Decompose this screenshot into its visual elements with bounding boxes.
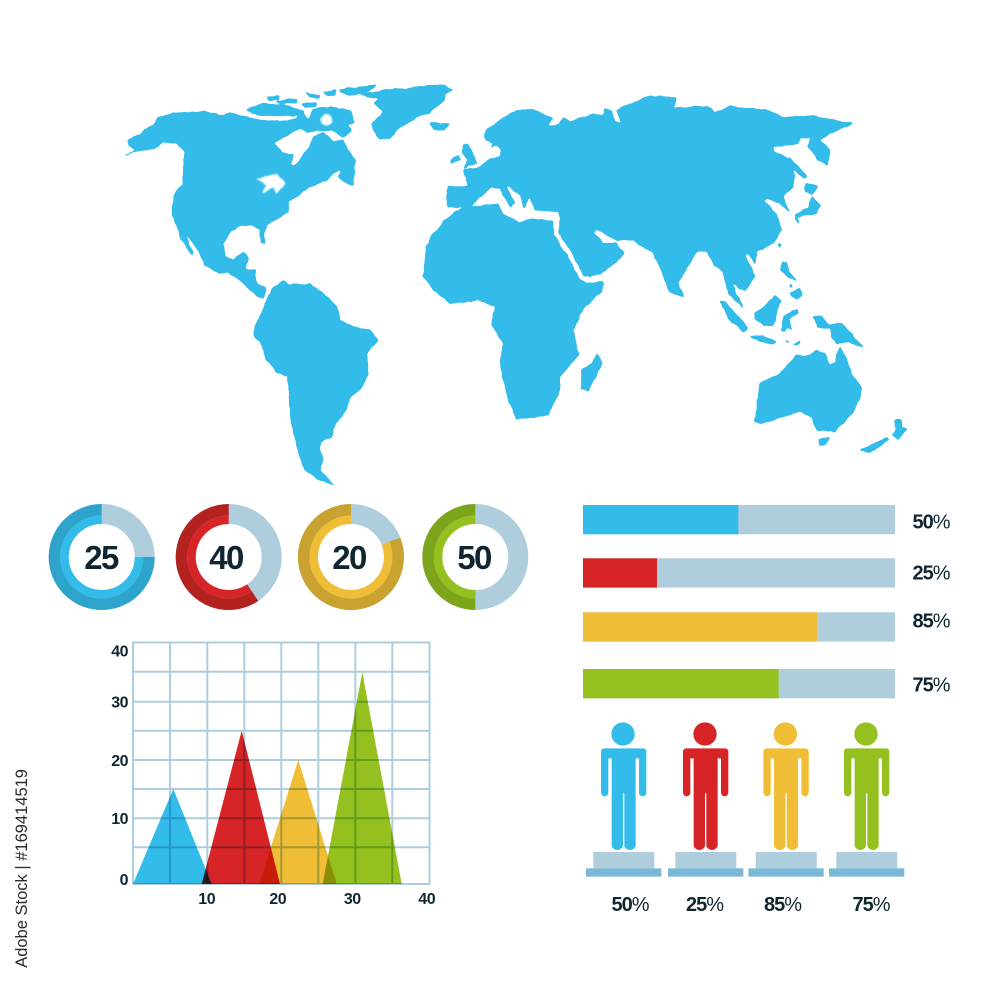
x axis labels: 20 xyxy=(269,891,287,908)
bar: 25%: 25% xyxy=(912,562,951,584)
bar: 85%: 85% xyxy=(912,610,951,632)
person: green 75% xyxy=(829,722,904,877)
chart grid xyxy=(133,642,430,884)
y axis labels: 40 xyxy=(111,644,129,660)
bar: 75%: 75% xyxy=(912,675,951,697)
bar: 75% xyxy=(583,669,951,698)
Madagascar xyxy=(582,353,603,392)
triangle: green xyxy=(323,672,402,884)
New Zealand xyxy=(860,420,907,453)
Australia xyxy=(755,347,862,432)
Baffin hole xyxy=(322,115,332,125)
bar: 50%: 50% xyxy=(912,511,951,533)
people percentages xyxy=(612,894,891,916)
person: blue 50% xyxy=(586,722,661,877)
Great Lakes xyxy=(258,174,286,193)
bar: 25% xyxy=(583,558,951,588)
Iceland xyxy=(430,123,449,130)
Eurasia xyxy=(447,96,853,308)
people percentages: 25% xyxy=(686,894,724,916)
UK and Ireland xyxy=(451,143,477,168)
donut: 25 xyxy=(54,510,149,604)
y axis labels: 30 xyxy=(111,694,129,712)
y axis labels: 0 xyxy=(120,872,129,889)
people pictograms xyxy=(586,722,904,916)
donut: 40 xyxy=(181,510,272,604)
y axis labels: 10 xyxy=(111,811,129,828)
Tasmania xyxy=(818,437,830,446)
donut charts xyxy=(54,510,518,604)
donut: 25: 25 xyxy=(84,539,119,576)
triangle: yellow xyxy=(259,760,337,884)
triangle chart xyxy=(111,642,436,908)
x axis labels: 10 xyxy=(198,891,216,908)
North America xyxy=(125,107,355,298)
map: Americas and Greenland xyxy=(125,84,453,485)
Arctic islands xyxy=(247,85,377,116)
triangle: blue xyxy=(133,789,212,884)
y axis labels xyxy=(111,644,129,889)
people percentages: 85% xyxy=(764,894,802,916)
y axis labels: 20 xyxy=(111,753,129,770)
person: yellow 85% xyxy=(748,722,824,877)
map: Eurasia, Africa and Oceania xyxy=(423,96,907,453)
triangle: red xyxy=(202,731,280,884)
x axis labels: 30 xyxy=(344,891,361,908)
donut: 20: 20 xyxy=(332,539,366,576)
Africa xyxy=(423,204,603,419)
Japan and Sakhalin xyxy=(789,157,820,223)
world map xyxy=(125,84,907,485)
donut: 20 xyxy=(304,510,398,604)
bar: 50% xyxy=(583,505,951,534)
people percentages: 75% xyxy=(852,894,891,916)
South America xyxy=(254,280,378,485)
progress bars xyxy=(583,505,951,698)
Southeast Asian islands xyxy=(720,243,863,347)
stock credit line: Adobe Stock | #169414519 xyxy=(13,769,31,968)
people percentages: 50% xyxy=(612,894,650,916)
donut: 50 xyxy=(428,510,518,604)
donut: 40: 40 xyxy=(209,539,243,576)
bar: 85% xyxy=(583,610,951,642)
donut: 50: 50 xyxy=(457,539,491,576)
x axis labels xyxy=(198,891,436,908)
Greenland xyxy=(360,84,453,138)
x axis labels: 40 xyxy=(418,891,436,908)
person: red 25% xyxy=(668,722,743,877)
